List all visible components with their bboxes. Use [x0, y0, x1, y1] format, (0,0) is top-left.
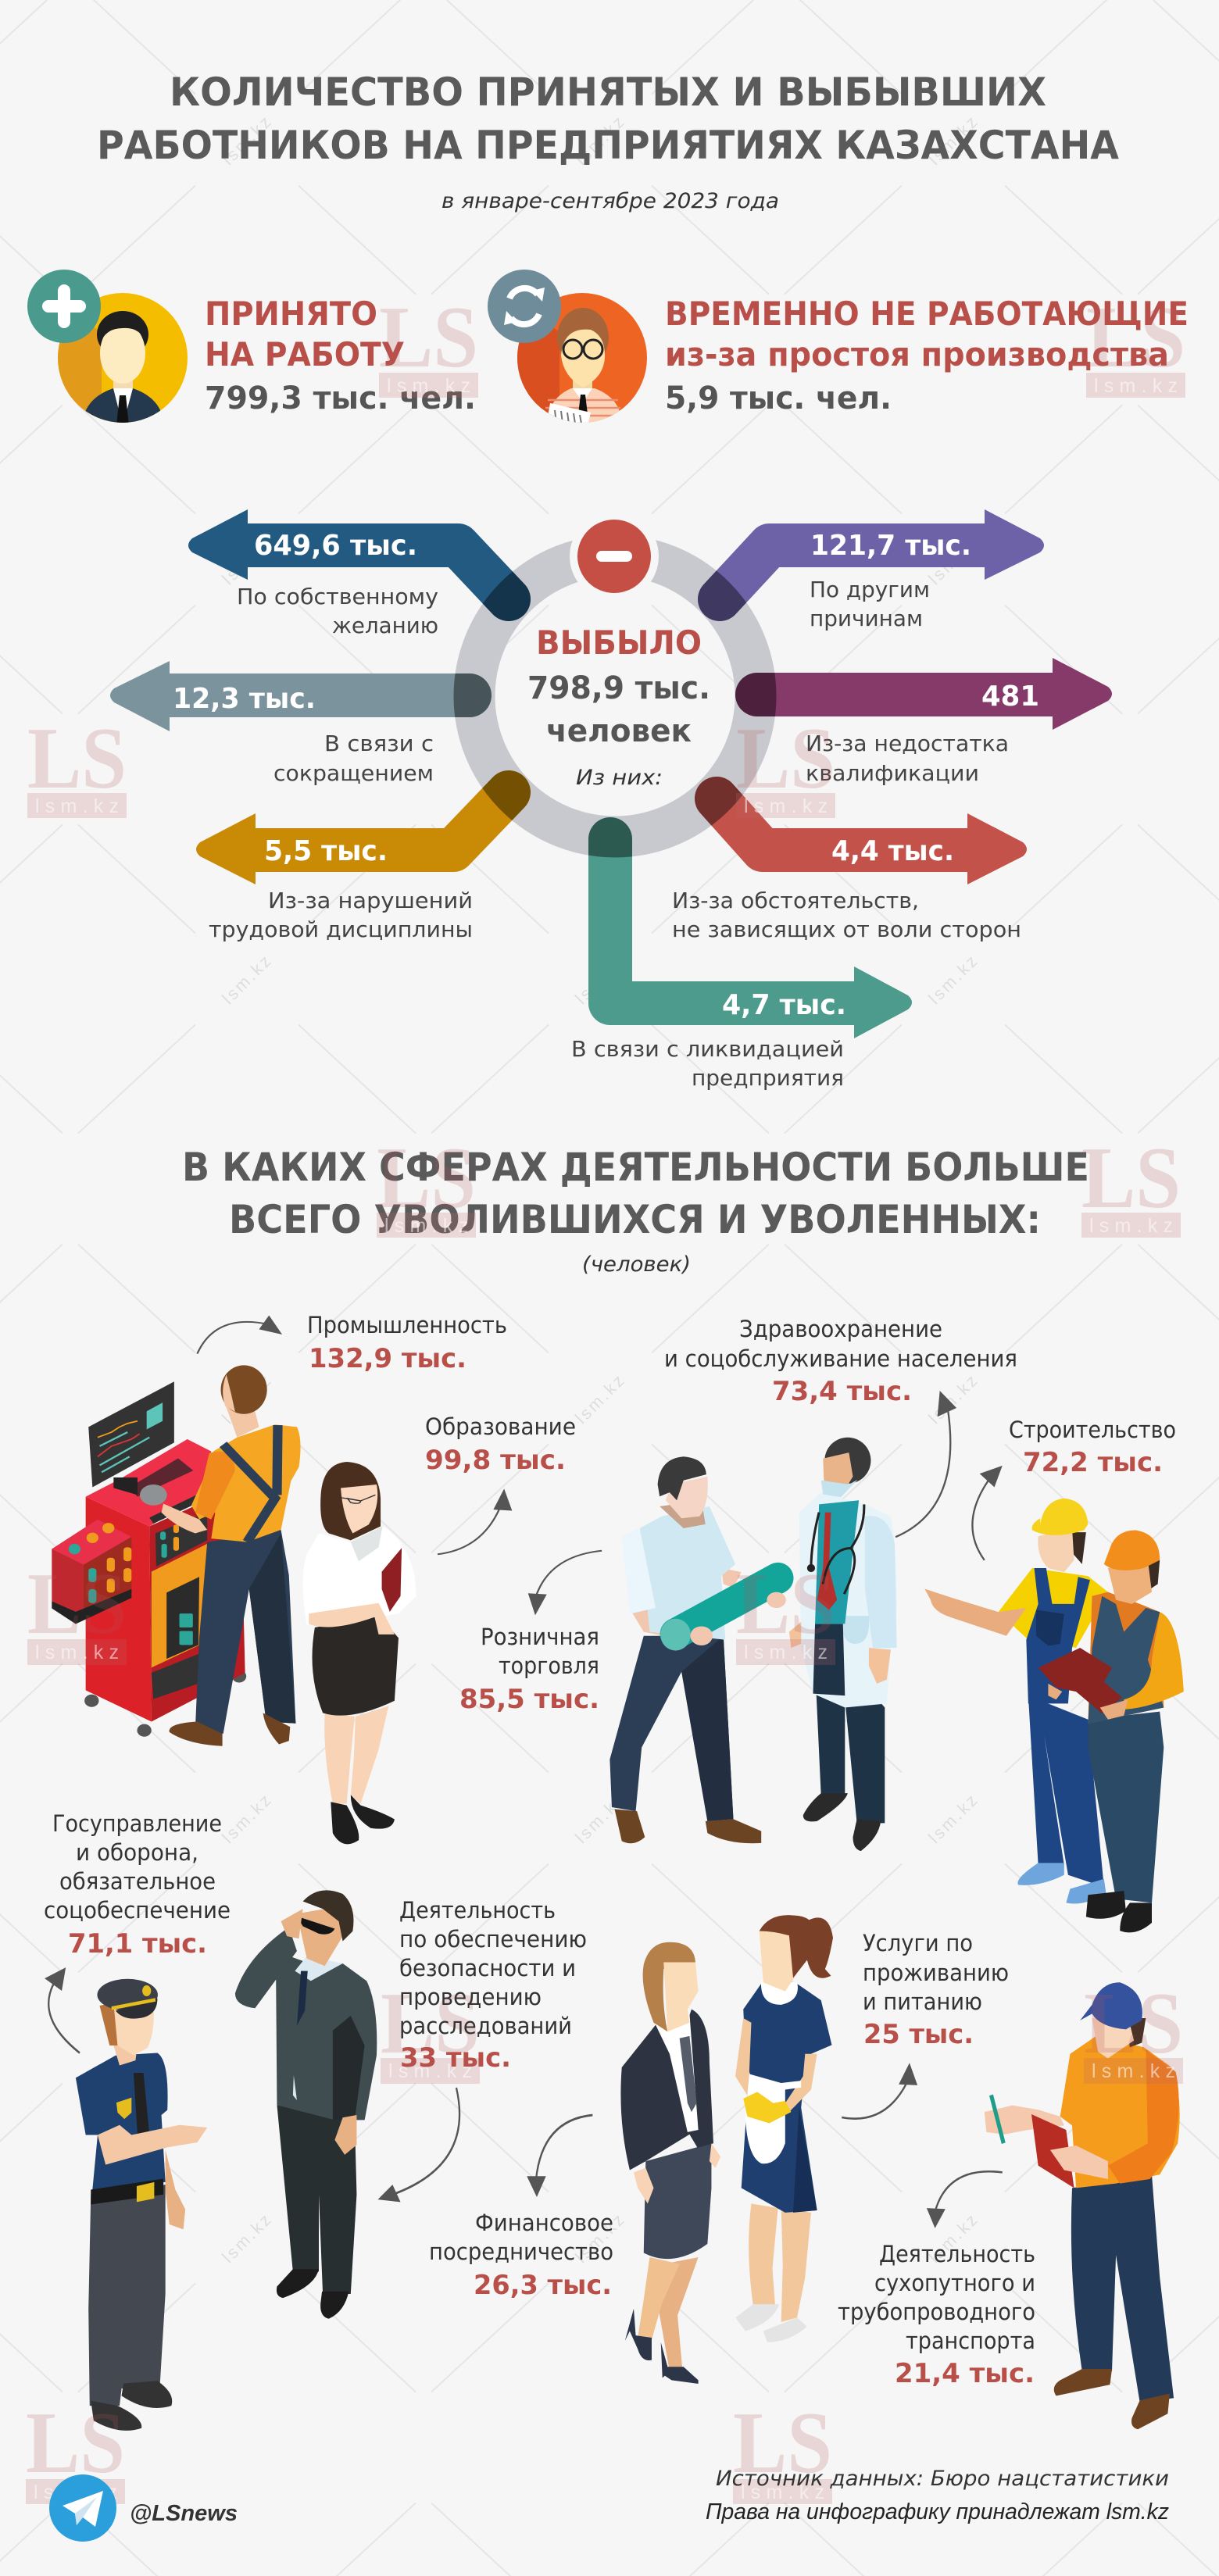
center text: departed total: Из них:	[576, 766, 663, 790]
watermarks: LS	[1081, 1130, 1181, 1227]
arrow: to finance	[527, 2115, 592, 2197]
label: other reasons: По другим	[810, 577, 930, 602]
sector: transport: 21,4 тыс.	[895, 2358, 1035, 2389]
sector: hospitality: и питанию	[863, 1988, 982, 2015]
watermarks: lsm.kz	[35, 795, 119, 817]
watermarks: lsm.kz	[741, 2481, 824, 2503]
label: liquidation: В связи с ликвидацией	[571, 1036, 844, 1062]
heading: sectors	[182, 1145, 1089, 1242]
arrow: own will: 649,6 тыс.	[254, 530, 417, 562]
watermarks: lsm.kz	[35, 1642, 119, 1663]
arrow: to government	[45, 1967, 80, 2053]
watermarks: LS	[736, 1556, 835, 1652]
note: unit: (человек)	[582, 1252, 691, 1277]
watermarks: LS	[736, 710, 835, 807]
sector: government: 71,1 тыс.	[68, 1928, 207, 1960]
watermarks: LS	[27, 1556, 127, 1652]
watermarks: lsm.kz	[1094, 375, 1178, 397]
arrow: other reasons: 121,7 тыс.	[810, 530, 971, 562]
icon: temporarily idle portrait	[517, 293, 647, 423]
sector: transport	[838, 2241, 1035, 2389]
arrow: to hospitality	[842, 2063, 917, 2119]
label: liquidation: предприятия	[692, 1065, 844, 1091]
sector: retail	[459, 1624, 599, 1715]
text: hired	[205, 295, 476, 416]
label: lack of qualification: квалификации	[806, 760, 979, 786]
sector: government: обязательное	[59, 1868, 216, 1895]
center text: departed total: ВЫБЫЛО	[536, 623, 702, 662]
watermarks: lsm.kz	[1089, 1215, 1173, 1237]
sector: finance: Финансовое	[475, 2210, 613, 2236]
arrow: to healthcare	[895, 1391, 956, 1537]
sector: government	[44, 1810, 231, 1960]
text: temporarily idle: 5,9 тыс. чел.	[665, 381, 892, 416]
watermarks: lsm.kz	[387, 375, 470, 397]
sector: security: проведению	[399, 1984, 542, 2010]
sector: healthcare	[664, 1316, 1017, 1407]
arrow: discipline violations: 5,5 тыс.	[264, 835, 388, 867]
source note: Права на инфографику принадлежат lsm.kz	[706, 2499, 1169, 2524]
watermarks: LS	[26, 2395, 125, 2492]
sector: finance: посредничество	[429, 2238, 613, 2265]
arrow: circumstances	[717, 799, 1027, 884]
sector: security: 33 тыс.	[400, 2042, 511, 2074]
label: other reasons	[810, 577, 930, 631]
arrow: liquidation	[610, 839, 912, 1038]
label: lack of qualification: Из-за недостатка	[806, 731, 1009, 756]
telegram handle: @LSnews	[130, 2501, 238, 2526]
label: circumstances	[672, 888, 1021, 942]
icon: refresh badge	[488, 270, 561, 343]
watermarks: LS	[27, 710, 127, 807]
text: temporarily idle: ВРЕМЕННО НЕ РАБОТАЮЩИЕ	[665, 295, 1189, 333]
illustration: machine operator	[52, 1365, 301, 1746]
illustration: business woman	[620, 1942, 720, 2384]
text: temporarily idle	[665, 295, 1189, 416]
text: hired: ПРИНЯТО	[205, 295, 377, 333]
icon: plus badge	[27, 270, 101, 343]
sector: transport: транспорта	[906, 2328, 1035, 2354]
icon: telegram	[49, 2474, 116, 2542]
label: discipline violations: Из-за нарушений	[268, 888, 473, 913]
sector: retail: Розничная	[481, 1624, 599, 1650]
sector: education	[425, 1413, 576, 1476]
sector: security: Деятельность	[399, 1897, 556, 1924]
watermarks: lsm.kz	[384, 1215, 468, 1237]
sector: transport: сухопутного и	[874, 2270, 1035, 2296]
sector: education: Образование	[425, 1413, 576, 1440]
sector: finance: 26,3 тыс.	[474, 2270, 612, 2301]
label: staff reduction: В связи с	[324, 731, 434, 756]
sector: finance	[429, 2210, 613, 2301]
watermarks: LS	[1084, 1975, 1183, 2072]
sector: education: 99,8 тыс.	[425, 1445, 566, 1476]
icon: hired portrait	[58, 293, 188, 423]
sector: healthcare: и соцобслуживание населения	[664, 1345, 1017, 1372]
arrow: to security	[377, 2088, 459, 2202]
label: discipline violations	[209, 888, 473, 942]
label: lack of qualification	[806, 731, 1009, 786]
sector: industry: 132,9 тыс.	[309, 1343, 467, 1374]
label: own will: По собственному	[237, 584, 438, 609]
sector: hospitality: Услуги по	[863, 1930, 973, 1956]
arrow: staff reduction: 12,3 тыс.	[173, 683, 316, 715]
sector: government: и оборона,	[76, 1839, 198, 1866]
sector: government: Госуправление	[52, 1810, 222, 1837]
ring: departed workers	[474, 556, 756, 837]
illustration: doctor	[789, 1438, 897, 1851]
sector: construction: 72,2 тыс.	[1023, 1447, 1163, 1478]
sector: security: безопасности и	[399, 1955, 576, 1981]
label: circumstances: не зависящих от воли сторон	[672, 916, 1021, 942]
illustration: construction workers	[924, 1499, 1184, 1932]
label: circumstances: Из-за обстоятельств,	[672, 888, 919, 913]
arrow: staff reduction	[110, 661, 470, 731]
subtitle: period: в январе-сентябре 2023 года	[441, 189, 779, 213]
arrow: to industry	[197, 1315, 282, 1354]
watermarks: lsm.kz	[744, 1642, 828, 1663]
sector: construction: Строительство	[1009, 1417, 1176, 1443]
watermarks: LS	[381, 1975, 480, 2072]
illustration: maid	[735, 1915, 833, 2342]
watermarks: LS	[733, 2395, 832, 2492]
sector: construction	[1009, 1417, 1176, 1478]
sector: hospitality: 25 тыс.	[863, 2019, 974, 2050]
sector: retail: 85,5 тыс.	[459, 1684, 599, 1715]
sector: retail: торговля	[499, 1652, 599, 1679]
label: staff reduction: сокращением	[273, 760, 434, 786]
sector: security: расследований	[399, 2013, 572, 2039]
illustration: police officer	[76, 1979, 207, 2431]
center text: departed total: человек	[546, 713, 692, 749]
sector: transport: трубопроводного	[838, 2299, 1035, 2325]
sector: industry	[307, 1312, 507, 1374]
arrow: circumstances: 4,4 тыс.	[831, 835, 954, 867]
sector: government: соцобеспечение	[44, 1897, 231, 1924]
center text: departed total: 798,9 тыс.	[527, 670, 710, 706]
icon: minus badge	[570, 512, 659, 601]
watermarks: lsm.kz	[744, 795, 828, 817]
sector: security: по обеспечению	[399, 1926, 587, 1953]
label: discipline violations: трудовой дисциплины	[209, 916, 473, 942]
text: temporarily idle: из-за простоя производства	[665, 335, 1169, 373]
arrow: to construction	[972, 1466, 1003, 1560]
arrow: lack of qualification: 481	[981, 681, 1039, 713]
heading: sectors: В КАКИХ СФЕРАХ ДЕЯТЕЛЬНОСТИ БОЛЬШЕ	[182, 1145, 1089, 1190]
watermarks: lsm.kz	[388, 2060, 472, 2082]
watermarks: LS	[379, 289, 478, 386]
source note	[706, 2467, 1169, 2524]
sector: transport: Деятельность	[879, 2241, 1035, 2267]
source note: Источник данных: Бюро нацстатистики	[716, 2467, 1169, 2491]
illustration: man with tube	[610, 1456, 786, 1843]
sector: industry: Промышленность	[307, 1312, 507, 1338]
watermarks: LS	[377, 1130, 476, 1227]
sector: healthcare: Здравоохранение	[739, 1316, 942, 1342]
arrow: discipline violations	[196, 792, 509, 884]
label: own will: желанию	[332, 613, 438, 638]
arrow: liquidation: 4,7 тыс.	[722, 989, 846, 1021]
title: РАБОТНИКОВ НА ПРЕДПРИЯТИЯХ КАЗАХСТАНА	[97, 123, 1119, 168]
illustration: security agent	[235, 1890, 377, 2319]
heading: sectors: ВСЕГО УВОЛИВШИХСЯ И УВОЛЕННЫХ:	[229, 1197, 1041, 1242]
center text: departed total	[527, 623, 710, 790]
illustration: office woman	[303, 1462, 416, 1844]
label: staff reduction	[273, 731, 434, 786]
arrow: own will	[188, 509, 509, 599]
illustration: delivery man	[985, 1982, 1180, 2429]
arrow: other reasons	[720, 509, 1044, 599]
sector: hospitality: проживанию	[863, 1960, 1009, 1986]
label: other reasons: причинам	[810, 606, 923, 631]
arrow: lack of qualification	[757, 658, 1112, 730]
arrow: to transport	[927, 2171, 1003, 2228]
watermarks: lsm.kz	[1092, 2060, 1175, 2082]
label: liquidation	[571, 1036, 844, 1091]
text: hired: 799,3 тыс. чел.	[205, 381, 476, 416]
watermarks: LS	[1086, 289, 1185, 386]
sector: hospitality	[863, 1930, 1009, 2050]
title: КОЛИЧЕСТВО ПРИНЯТЫХ И ВЫБЫВШИХ	[170, 70, 1046, 115]
arrow: to retail	[528, 1551, 602, 1615]
label: own will	[237, 584, 438, 638]
watermarks: lsm.kz	[34, 2481, 117, 2503]
sector: security	[399, 1897, 587, 2074]
arrow: to education	[438, 1488, 512, 1554]
sector: healthcare: 73,4 тыс.	[772, 1376, 912, 1407]
text: hired: НА РАБОТУ	[205, 335, 405, 373]
title	[97, 70, 1119, 168]
